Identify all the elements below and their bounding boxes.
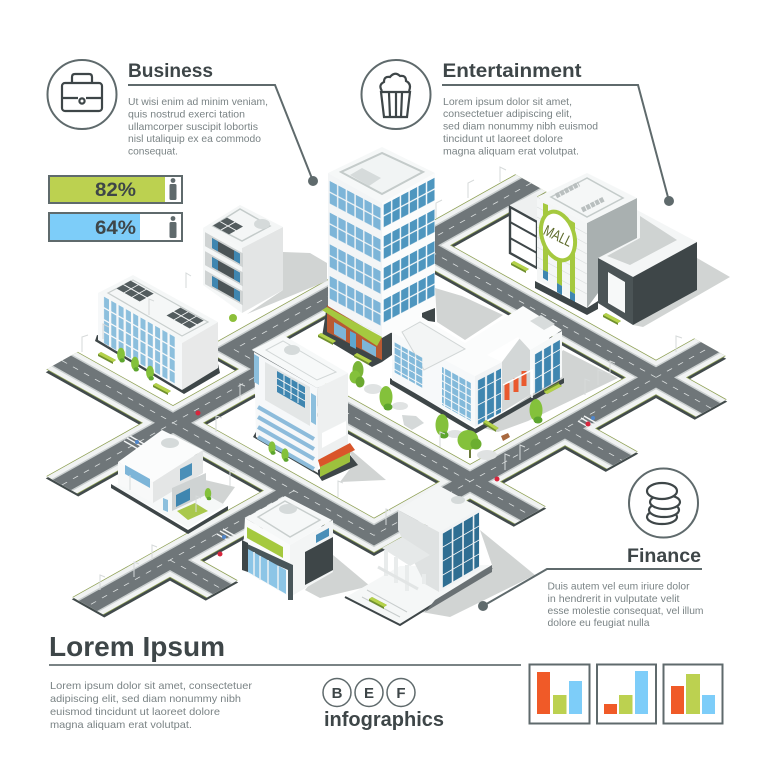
- text block: entertainment: sed diam nonummy nibh euismod: [443, 120, 598, 132]
- building: stepped office: [252, 335, 358, 481]
- road network: [0, 141, 768, 687]
- text block: business: nisl utaliquip ex ea commodo: [128, 133, 261, 145]
- building: mall: MALL: [541, 222, 575, 251]
- building: bank on a pad: [345, 485, 492, 625]
- crosswalks and cars: [124, 410, 598, 556]
- text block: intro: [50, 680, 253, 731]
- icon: briefcase: [48, 60, 116, 129]
- progress bar: 64%: [49, 213, 182, 241]
- heading: business: Business: [128, 61, 213, 82]
- title: Lorem Ipsum: [49, 631, 225, 662]
- text block: intro: magna aliquam erat volutpat.: [50, 719, 192, 731]
- ground shadows: [200, 213, 730, 617]
- text block: business: [128, 96, 268, 158]
- heading: entertainment: Entertainment: [442, 61, 582, 82]
- panel: entertainment: [362, 60, 674, 206]
- logo: BEF infographics: B: [332, 685, 343, 702]
- logo: BEF infographics: F: [396, 685, 406, 702]
- text block: finance: esse molestie consequat, vel illum: [548, 605, 704, 617]
- callout line: finance: [478, 569, 702, 611]
- building: small house: [111, 430, 228, 534]
- bar chart 1: [530, 664, 590, 724]
- text block: entertainment: magna aliquam erat volutpat.: [443, 146, 579, 158]
- text block: intro: euismod tincidunt ut laoreet dolore: [50, 706, 220, 718]
- logo: BEF infographics: infographics: [324, 709, 444, 731]
- building: residential with solar panels: [203, 205, 283, 322]
- text block: finance: dolore eu feugiat nulla: [548, 617, 650, 629]
- icon: popcorn: [362, 60, 430, 129]
- panel: finance: [478, 468, 704, 629]
- bar chart 3: [664, 664, 722, 724]
- building: corner shop: [242, 496, 333, 600]
- progress bar: 82%: [49, 176, 182, 203]
- callout line: business: [128, 85, 318, 186]
- text block: entertainment: Lorem ipsum dolor sit amet,: [443, 96, 572, 108]
- logo: BEF infographics: [323, 678, 444, 731]
- text block: entertainment: tincidunt ut laoreet dolore: [443, 133, 563, 145]
- text block: business: Ut wisi enim ad minim veniam,: [128, 96, 268, 108]
- panel: business: [48, 60, 318, 241]
- progress bar: 82%: 82%: [95, 180, 136, 201]
- building: tall glass tower: [318, 147, 435, 367]
- street lamps: [82, 167, 682, 590]
- text block: intro: Lorem ipsum dolor sit amet, consectetuer: [50, 680, 253, 692]
- building: mall: [510, 173, 697, 325]
- bar chart 2: [597, 664, 656, 724]
- building: L-shaped centre block: [390, 306, 564, 434]
- text block: business: consequat.: [128, 146, 178, 158]
- text block: business: quis nostrud exerci tation: [128, 108, 245, 120]
- callout line: entertainment: [442, 85, 674, 206]
- building: long block with solar panels: [95, 275, 220, 395]
- text block: finance: in hendrerit in vulputate velit: [548, 593, 680, 605]
- logo: BEF infographics: E: [364, 685, 374, 702]
- heading: finance: Finance: [627, 546, 701, 567]
- icon: coins: [629, 468, 698, 538]
- trees and plaza furniture: [350, 361, 542, 460]
- text block: finance: [548, 580, 704, 629]
- text block: finance: Duis autem vel eum iriure dolor: [548, 580, 690, 592]
- text block: intro: adipiscing elit, sed diam nonummy nibh: [50, 693, 241, 705]
- text block: entertainment: consectetuer adipiscing elit,: [443, 108, 572, 120]
- progress bar: 64%: 64%: [95, 218, 136, 239]
- title rule: [49, 664, 521, 666]
- text block: entertainment: [443, 96, 598, 158]
- text block: business: ullamcorper suscipit lobortis: [128, 121, 258, 133]
